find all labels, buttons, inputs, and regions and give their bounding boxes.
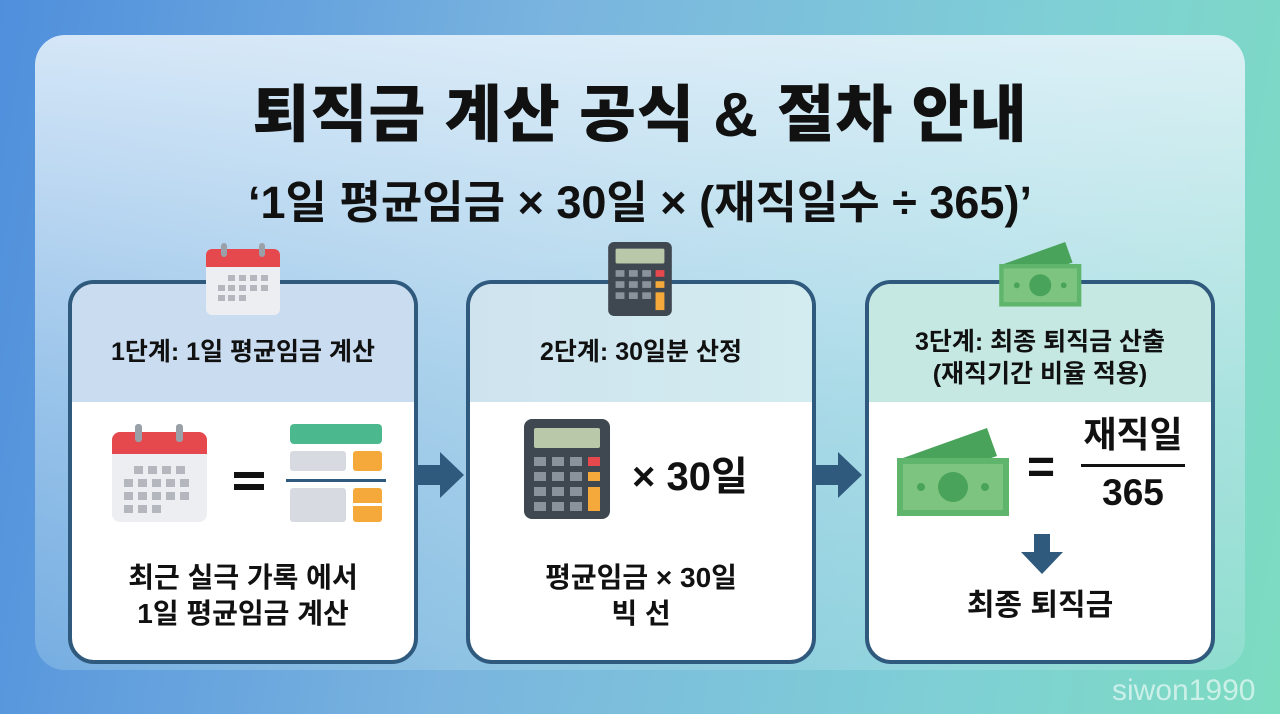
icon: money equals fraction: 365 [1102,472,1164,513]
step 1 description [128,562,358,629]
icon: down arrow [1021,534,1063,574]
step 1 header [72,284,414,402]
formula subtitle: ‘1일 평균임금 × 30일 × (재직일수 ÷ 365)’ [248,177,1032,228]
panel: step 3 [865,280,1215,664]
arrow 2 [816,452,862,498]
step 1 description: 1일 평균임금 계산 [137,598,349,629]
step 3 header [869,284,1211,402]
step 2 description: 빅 선 [611,598,671,629]
step 3 result: 최종 퇴직금 [967,589,1113,622]
title: 퇴직금 계산 공식 & 절차 안내 [252,81,1028,150]
icon: money equals fraction [897,414,1185,516]
step 1 description: 최근 실극 가록 에서 [128,562,358,593]
step 2 description [545,562,737,629]
icon: calendar equals table [112,424,386,522]
watermark: siwon1990 [1112,674,1255,707]
icon: calculator times 30 [524,419,748,519]
icon: money equals fraction: = [1027,441,1055,494]
icon: calculator times 30: × 30일 [632,455,748,499]
arrow 1 [418,452,464,498]
icon: money equals fraction: 재직일 [1083,414,1183,455]
step 3 header: 3단계: 최종 퇴직금 산출 [915,328,1165,356]
icon: calendar top 1 [206,243,280,315]
icon: money top [999,242,1082,307]
panel: step 2 [466,280,816,664]
step 2 header [470,284,812,402]
step 3 header: (재직기간 비율 적용) [933,360,1147,388]
step 1 header: 1단계: 1일 평균임금 계산 [111,338,375,366]
icon: calculator top [608,242,672,316]
panel: step 1 [68,280,418,664]
step 2 header: 2단계: 30일분 산정 [540,338,742,366]
step 2 description: 평균임금 × 30일 [545,562,737,593]
